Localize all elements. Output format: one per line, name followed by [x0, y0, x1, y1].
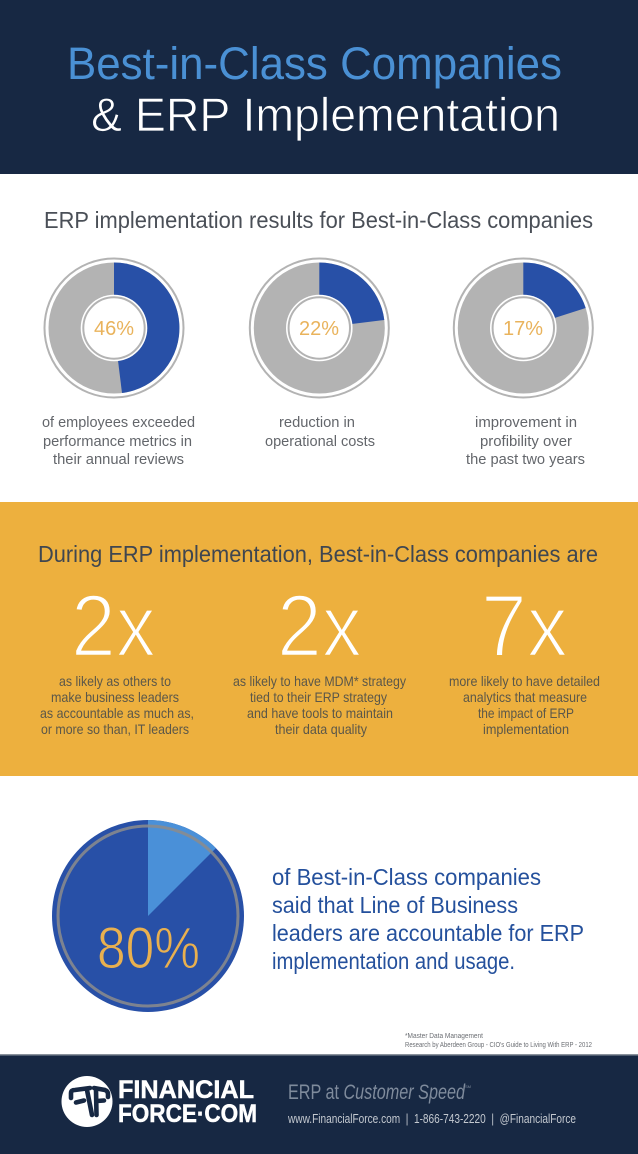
stat: 7x analytics: more likely to have detailed: [449, 673, 600, 689]
stat: 2x MDM: 2x: [277, 576, 362, 675]
stat: 7x analytics: [449, 576, 600, 737]
tagline: ERP at Customer Speed: [288, 1081, 466, 1104]
panel: during implementation: [0, 502, 638, 776]
stat: 2x leaders: as likely as others to: [59, 673, 171, 689]
callout text: [272, 864, 584, 974]
heading: results: ERP implementation results for Best-in-Class companies: [44, 207, 593, 233]
stat: 7x analytics: analytics that measure: [463, 689, 587, 705]
stat: 7x analytics: implementation: [483, 721, 569, 737]
caption: profitability: the past two years: [466, 451, 585, 468]
tagline: SM: [465, 1084, 471, 1089]
footnote: *Master Data Management: [405, 1033, 483, 1040]
logo: FINANCIAL: [118, 1076, 254, 1104]
icon: logo mark: [62, 1076, 112, 1127]
caption: employees: of employees exceeded: [42, 414, 195, 431]
panel: 80 percent: [52, 820, 592, 1049]
callout text: said that Line of Business: [272, 892, 518, 918]
stat: 2x leaders: as accountable as much as,: [40, 705, 194, 721]
footnote: Research by Aberdeen Group - CIO's Guide to Living With ERP - 2012: [405, 1042, 592, 1049]
caption: profitability: improvement in: [475, 414, 577, 431]
logo: FORCE·COM: [118, 1100, 257, 1128]
stat: 2x leaders: 2x: [71, 576, 156, 675]
caption: employees: their annual reviews: [53, 451, 184, 468]
title: & ERP Implementation: [91, 88, 560, 141]
stat: 2x MDM: tied to their ERP strategy: [250, 689, 387, 705]
pie chart: 80%: 80%: [97, 916, 200, 981]
donut chart: 22%: 22%: [299, 318, 339, 340]
donut chart: 46%: [44, 258, 184, 398]
stat: 2x MDM: their data quality: [275, 721, 367, 737]
callout text: leaders are accountable for ERP: [272, 920, 584, 946]
caption: profitability: [466, 414, 585, 468]
logo: [62, 1076, 257, 1128]
pie chart: 80%: [52, 820, 244, 1012]
contact line: www.FinancialForce.com | 1-866-743-2220 | @FinancialForce: [287, 1112, 576, 1126]
panel: results donuts: [42, 258, 593, 468]
stat: 2x leaders: [40, 576, 194, 737]
caption: costs: [265, 414, 375, 450]
stat: 2x MDM: and have tools to maintain: [247, 705, 393, 721]
stat: 7x analytics: the impact of ERP: [478, 705, 574, 721]
stat: 7x analytics: 7x: [481, 576, 568, 675]
caption: employees: [42, 414, 195, 468]
caption: employees: performance metrics in: [43, 433, 192, 450]
caption: costs: reduction in: [279, 414, 355, 431]
stat: 2x MDM: [233, 576, 406, 737]
donut chart: 17%: 17%: [503, 318, 543, 340]
footnote: [405, 1033, 592, 1049]
stat: 2x MDM: as likely to have MDM* strategy: [233, 673, 406, 689]
callout text: of Best-in-Class companies: [272, 864, 541, 890]
donut chart: 17%: [454, 258, 593, 398]
stat: 2x leaders: make business leaders: [51, 689, 179, 705]
caption: costs: operational costs: [265, 433, 375, 450]
heading: during: During ERP implementation, Best-in-Class companies are: [38, 541, 598, 567]
stat: 2x leaders: or more so than, IT leaders: [41, 721, 189, 737]
title: [67, 38, 562, 141]
callout text: implementation and usage.: [272, 948, 515, 974]
donut chart: 46%: 46%: [94, 318, 134, 340]
caption: profitability: profibility over: [480, 433, 572, 450]
title: Best-in-Class Companies: [67, 38, 562, 89]
footer: [0, 1054, 638, 1154]
donut chart: 22%: [250, 258, 389, 398]
header banner: [0, 0, 638, 174]
